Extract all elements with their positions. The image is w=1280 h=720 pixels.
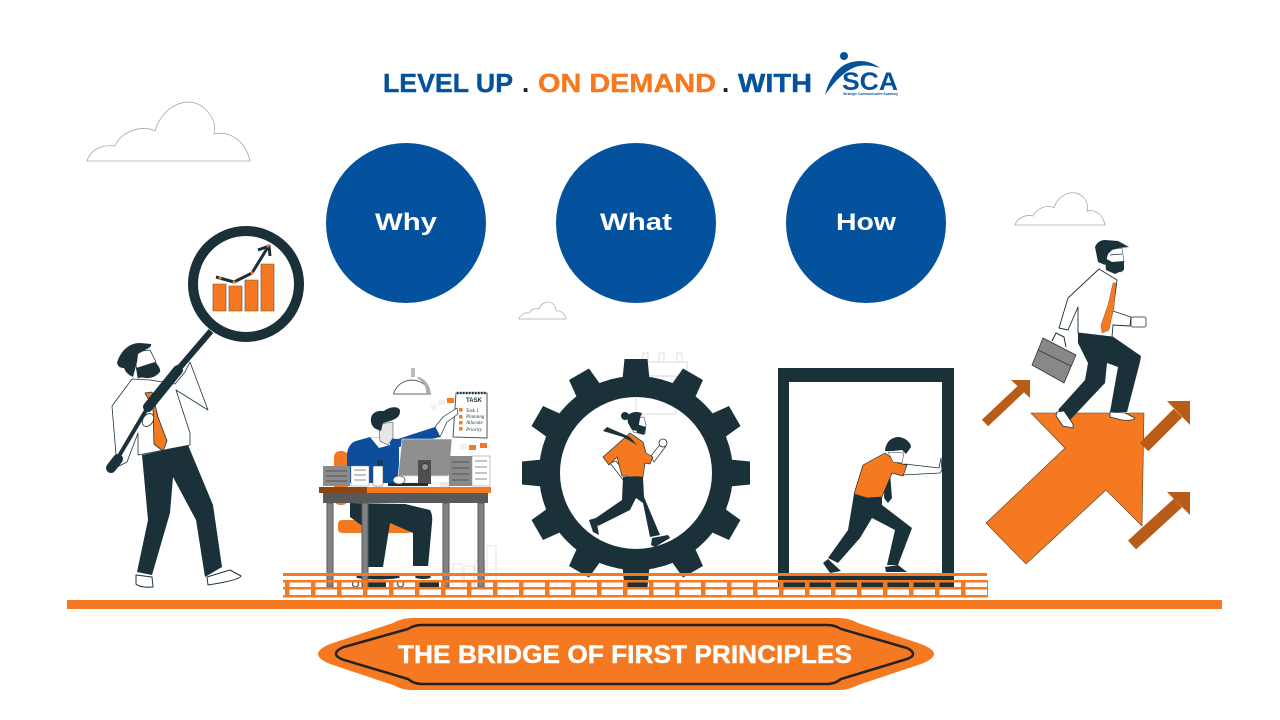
title: LEVEL UP [383,68,513,98]
growth arrow: small top left [985,380,1030,423]
shoes and wheels [352,574,439,587]
hair [117,343,151,377]
circle: How: How [836,209,896,236]
task note [453,393,487,438]
magnifier lens [193,231,299,337]
cloud: top right [1015,193,1105,225]
face [888,452,904,463]
figure: man pushing door [823,437,942,573]
pen cup [373,460,383,486]
shoes [589,518,599,535]
logo: SCA: SCA [842,68,898,96]
desk legs [327,503,484,587]
figure: man working at desk [319,368,491,587]
cloud: top left [87,102,250,161]
shirt [1059,269,1131,337]
circle: Why [326,143,486,303]
tie [145,392,167,451]
bridge railing [283,573,988,598]
cuffs [368,566,428,572]
trousers [593,477,660,537]
paper stack: left [323,466,369,486]
hair [885,437,911,454]
desk top [319,487,491,503]
hair and bun [621,412,642,431]
circle: What [556,143,716,303]
briefcase [1032,333,1076,383]
figure: man with magnifying glass [111,231,299,587]
shirt [603,433,653,477]
door frame [778,368,954,587]
circle: Why: Why [375,209,438,236]
shoes [136,570,241,587]
head [134,350,156,378]
legs [350,503,432,568]
sticky notes [431,398,487,450]
trousers [828,494,912,565]
plaque: title banner: THE BRIDGE OF FIRST PRINCIPLES [398,641,852,669]
beard [636,424,646,435]
title: . [522,68,529,98]
front arm [651,442,666,462]
faint skyline behind desk [453,546,496,588]
shirt [112,362,208,467]
arms [902,458,942,475]
growth arrow: right lower [1132,492,1190,545]
tie [1101,283,1116,333]
trousers [1058,333,1141,420]
hair [1095,240,1129,265]
growth arrow: right upper [1144,401,1190,447]
collar [370,437,390,448]
logo: SCA [825,52,899,96]
flying tie [603,427,637,445]
task note: TASK [466,398,483,404]
beard [136,362,160,378]
torso [347,427,440,483]
task note: Allocate [465,421,483,426]
growth arrow: large orange [986,413,1144,564]
title: ON DEMAND [538,68,716,98]
hand [140,411,156,429]
hair [371,407,400,431]
monitor [388,439,452,487]
logo: SCA: Strategic Communicative Academy [843,91,899,96]
title [383,68,812,98]
task note: Planning [465,415,485,420]
trousers [137,445,222,577]
fist [659,439,667,447]
title: WITH [738,68,812,98]
face [1103,248,1124,272]
faint factory behind gear [636,353,687,414]
cloud: small centre [519,302,566,319]
face [633,417,646,434]
figure: man running in gear [589,412,670,547]
plaque: title banner [318,618,934,690]
face [379,422,393,445]
shoes [823,559,841,573]
magnifier handle [111,331,211,468]
arm reaching to note [435,408,458,437]
gear [522,359,750,587]
task note: Priority [465,428,483,433]
ceiling lamp [394,368,431,394]
chair [334,451,412,533]
glasses [1110,254,1122,255]
figure: man climbing with briefcase [1032,240,1146,428]
back arm [610,461,628,481]
fist [1131,317,1146,327]
paper stack: right [449,456,490,486]
bridge deck [67,600,1222,609]
task note: Task 1 [466,409,479,414]
bar chart in lens [213,244,274,311]
beard [1105,258,1124,274]
circle: What: What [600,209,672,236]
title: . [722,68,729,98]
shirt [854,453,907,498]
tie [884,473,892,503]
shoes [1056,411,1135,428]
circle: How [786,143,946,303]
